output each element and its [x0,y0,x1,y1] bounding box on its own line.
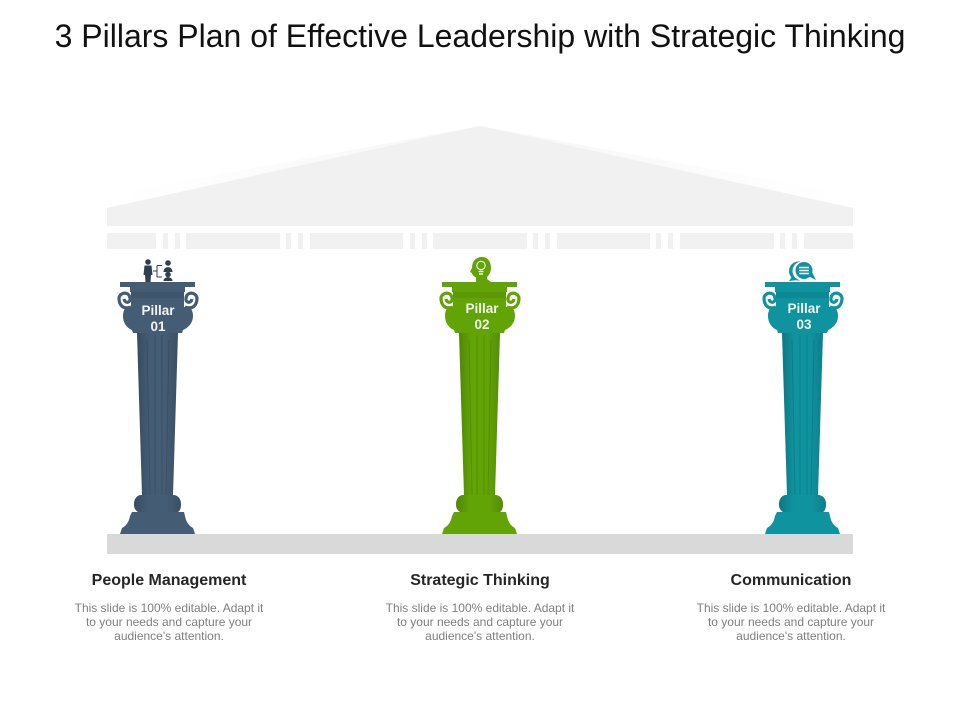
text block: People Management: audience's attention. [114,629,224,643]
text block: Communication [696,572,886,643]
roof pediment [107,126,853,226]
text block: Strategic Thinking: This slide is 100% editable. Adapt it [386,601,574,615]
pillar labels: 02 [474,317,490,332]
icon: people hierarchy [144,259,172,282]
title: 3 Pillars Plan of Effective Leadership with Strategic Thinking [55,18,905,54]
pillar labels: Pillar [141,303,175,318]
text block: Strategic Thinking: audience's attention. [425,629,535,643]
pillar labels: 01 [150,319,166,334]
text block: People Management: This slide is 100% editable. Adapt it [75,601,263,615]
text block: Strategic Thinking: Strategic Thinking [410,572,550,589]
icon: speech bubbles [789,262,816,281]
text block: Communication: This slide is 100% editable. Adapt it [697,601,885,615]
pillar labels: Pillar [465,301,499,316]
text block: People Management: People Management [92,572,246,589]
floor platform [107,534,853,554]
text block: Communication: audience's attention. [736,629,846,643]
pillar 1 [119,282,197,534]
text block: Communication: to your needs and capture your [708,615,874,629]
text block: Strategic Thinking: to your needs and capture your [397,615,563,629]
pillar labels: 03 [796,317,812,332]
text block: Communication: Communication [731,572,851,589]
text block: People Management: to your needs and capture your [86,615,252,629]
icon: head with light bulb [470,257,491,282]
text block: People Management [74,572,264,643]
pillar 3 [764,282,842,534]
pillar labels: Pillar [787,301,821,316]
pillar labels [141,301,821,334]
pillar 2 [441,282,519,534]
frieze [107,233,853,249]
text block: Strategic Thinking [386,572,574,643]
